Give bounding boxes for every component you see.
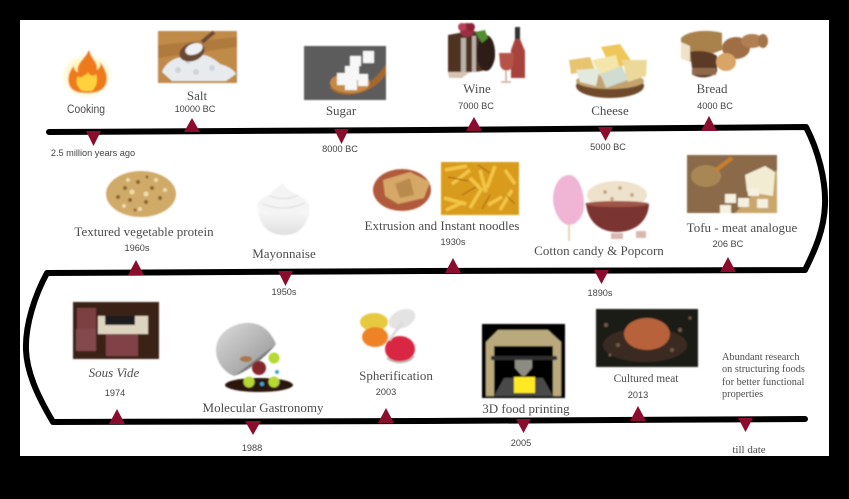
date: 10000 BC: 10000 BC <box>175 104 216 114</box>
image: sugar <box>304 46 386 100</box>
heading: 3D food printing: 3D food printing <box>482 401 570 416</box>
image: mayonnaise <box>257 183 310 235</box>
date: 1960s: 1960s <box>124 243 150 253</box>
date: 2005: 2005 <box>511 438 531 448</box>
date: 206 BC: 206 BC <box>713 239 744 249</box>
heading: Cotton candy & Popcorn: Cotton candy & Popcorn <box>534 243 664 258</box>
heading: Salt: Salt <box>187 88 207 103</box>
image: molecular gastronomy dome <box>216 323 293 392</box>
date: 8000 BC: 8000 BC <box>322 144 358 154</box>
image: tofu <box>687 155 777 213</box>
text block: abundant research <box>722 352 805 400</box>
date: 1930s: 1930s <box>440 237 466 247</box>
image: cotton candy and popcorn <box>553 175 649 241</box>
text block: abundant research: Abundant research <box>722 352 800 363</box>
heading: Wine: Wine <box>463 81 491 96</box>
text block: abundant research: for better functional <box>722 377 804 388</box>
heading: Extrusion and Instant noodles: Extrusion and Instant noodles <box>365 218 519 233</box>
heading: Spherification: Spherification <box>359 368 433 383</box>
heading: Mayonnaise: Mayonnaise <box>252 246 316 261</box>
heading: Cheese: Cheese <box>591 103 629 118</box>
date: 1988: 1988 <box>242 443 262 453</box>
text block: abundant research: properties <box>722 389 763 400</box>
image: spherification spoons <box>360 305 418 362</box>
date: 1950s: 1950s <box>271 287 297 297</box>
heading: Cultured meat: Cultured meat <box>614 373 679 385</box>
icon: cooking fire <box>61 50 113 99</box>
date: 2013: 2013 <box>628 390 648 400</box>
date: 2003: 2003 <box>376 387 396 397</box>
heading: Sugar: Sugar <box>326 103 357 118</box>
text block: abundant research: on structuring foods <box>722 364 805 375</box>
image: bread <box>681 31 768 77</box>
heading: Textured vegetable protein: Textured vegetable protein <box>74 224 214 239</box>
date: 2.5 million years ago: 2.5 million years ago <box>51 148 135 158</box>
date: 4000 BC: 4000 BC <box>697 101 733 111</box>
image: cultured meat <box>596 309 698 367</box>
image: salt <box>158 31 237 83</box>
timeline markers <box>86 116 753 435</box>
heading: Tofu - meat analogue: Tofu - meat analogue <box>687 220 798 235</box>
date: till date: till date <box>732 444 766 456</box>
date: 7000 BC: 7000 BC <box>458 101 494 111</box>
image: extrusion snack plate <box>373 169 431 211</box>
heading: Cooking: Cooking <box>67 104 105 116</box>
image: sous vide <box>73 302 159 359</box>
image: 3D food printer <box>482 324 565 398</box>
timeline path <box>26 127 825 422</box>
image: wine <box>448 23 525 82</box>
image: pasta <box>441 162 519 215</box>
date: 1974: 1974 <box>105 388 125 398</box>
image: cheese <box>569 44 647 98</box>
date: 5000 BC: 5000 BC <box>590 142 626 152</box>
heading: Bread: Bread <box>696 81 728 96</box>
heading: Sous Vide: Sous Vide <box>89 365 140 380</box>
date: 1890s: 1890s <box>587 288 613 298</box>
image: textured vegetable protein <box>106 171 176 217</box>
heading: Molecular Gastronomy: Molecular Gastronomy <box>203 400 324 415</box>
